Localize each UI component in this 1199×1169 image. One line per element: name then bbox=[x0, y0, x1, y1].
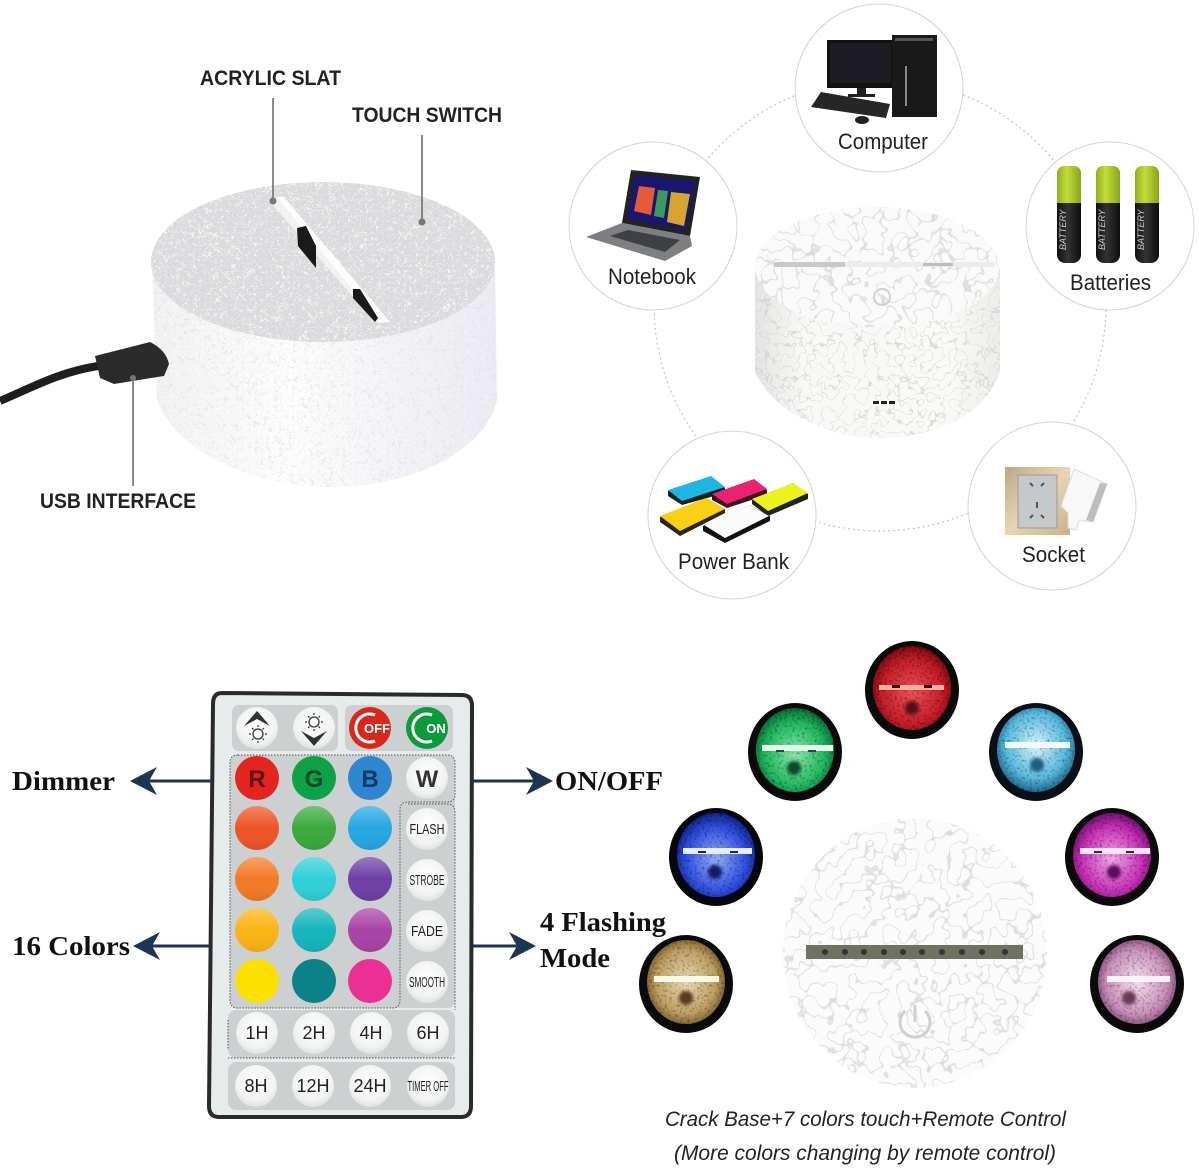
circle: batteries bbox=[1026, 142, 1194, 310]
circle: batteries: BATTERY bbox=[1058, 208, 1068, 250]
timer buttons: 8H bbox=[244, 1076, 268, 1096]
timer buttons: 1H bbox=[245, 1023, 269, 1043]
timer buttons: 24H bbox=[353, 1076, 387, 1096]
lamp: green bbox=[748, 703, 842, 801]
caption bbox=[665, 1108, 1067, 1165]
callout: 4 flashing mode: 4 Flashing bbox=[540, 907, 667, 937]
lamp: magenta bbox=[1065, 808, 1159, 906]
led strip bbox=[806, 945, 1023, 959]
label: touch switch bbox=[352, 104, 502, 226]
lamp: cyan bbox=[989, 703, 1083, 801]
callout: 4 flashing mode: Mode bbox=[540, 943, 610, 973]
caption: Crack Base+7 colors touch+Remote Control bbox=[665, 1108, 1067, 1131]
callout: dimmer bbox=[12, 766, 212, 796]
usb cable bbox=[0, 342, 169, 401]
button: brightness up bbox=[236, 707, 278, 749]
lamp base illustration bbox=[151, 182, 497, 487]
lamp: pink bbox=[1090, 935, 1184, 1033]
computer label: Computer bbox=[838, 129, 928, 154]
mode buttons: SMOOTH bbox=[409, 974, 445, 991]
callout: 4 flashing mode bbox=[473, 907, 667, 973]
panel: remote control bbox=[209, 693, 472, 1117]
button: off bbox=[349, 707, 391, 749]
button: brightness down bbox=[293, 707, 335, 749]
circle: batteries: BATTERY bbox=[1136, 208, 1146, 250]
center lamp base bbox=[755, 207, 1000, 438]
lamp: red bbox=[865, 641, 959, 739]
circle: batteries: BATTERY bbox=[1097, 208, 1107, 250]
colour buttons: G bbox=[305, 766, 323, 793]
label: touch switch: TOUCH SWITCH bbox=[352, 104, 502, 127]
timer buttons: 2H bbox=[302, 1023, 326, 1043]
callout: 16 colors: 16 Colors bbox=[12, 931, 130, 961]
circle: power bank bbox=[648, 431, 816, 599]
caption: (More colors changing by remote control) bbox=[674, 1142, 1056, 1165]
colour buttons: B bbox=[361, 766, 379, 793]
timer buttons: 6H bbox=[416, 1023, 440, 1043]
mode buttons bbox=[406, 808, 448, 1003]
colour buttons bbox=[235, 756, 448, 1003]
colour buttons: R bbox=[248, 766, 266, 793]
button: on: ON bbox=[426, 721, 446, 736]
label: usb interface bbox=[40, 375, 196, 513]
power bank label: Power Bank bbox=[678, 549, 790, 574]
panel: base anatomy bbox=[0, 67, 502, 513]
socket label: Socket bbox=[1022, 542, 1085, 567]
mode buttons: FLASH bbox=[410, 821, 444, 838]
mode buttons: STROBE bbox=[410, 872, 444, 889]
button: off: OFF bbox=[364, 721, 390, 736]
notebook label: Notebook bbox=[608, 264, 697, 289]
label: usb interface: USB INTERFACE bbox=[40, 490, 196, 513]
timer buttons bbox=[235, 1012, 449, 1107]
button group backgrounds bbox=[228, 705, 455, 1110]
button: on bbox=[406, 707, 448, 749]
circle: socket bbox=[968, 422, 1136, 590]
dashed ring bbox=[654, 79, 1106, 531]
dotted outlines bbox=[228, 755, 455, 1058]
timer buttons: 4H bbox=[359, 1023, 383, 1043]
callout: 16 colors bbox=[12, 931, 210, 961]
circle: notebook bbox=[569, 142, 737, 310]
timer buttons: 12H bbox=[296, 1076, 330, 1096]
colour buttons: W bbox=[416, 766, 439, 793]
circle: computer bbox=[795, 4, 963, 172]
batteries label: Batteries bbox=[1070, 270, 1151, 295]
lamp: warm bbox=[639, 935, 733, 1033]
lamp: blue bbox=[669, 808, 763, 906]
callout: on/off bbox=[473, 766, 663, 796]
callout: on/off: ON/OFF bbox=[555, 766, 663, 796]
callout: dimmer: Dimmer bbox=[12, 766, 115, 796]
label: acrylic slat bbox=[200, 67, 341, 204]
panel: colour modes bbox=[639, 641, 1184, 1088]
remote body bbox=[209, 693, 472, 1117]
top view of base bbox=[783, 818, 1047, 1088]
panel: power sources bbox=[569, 4, 1194, 599]
mode buttons: FADE bbox=[411, 923, 443, 940]
timer buttons: TIMER OFF bbox=[408, 1078, 448, 1095]
touch icon bbox=[900, 1005, 930, 1037]
label: acrylic slat: ACRYLIC SLAT bbox=[200, 67, 341, 90]
